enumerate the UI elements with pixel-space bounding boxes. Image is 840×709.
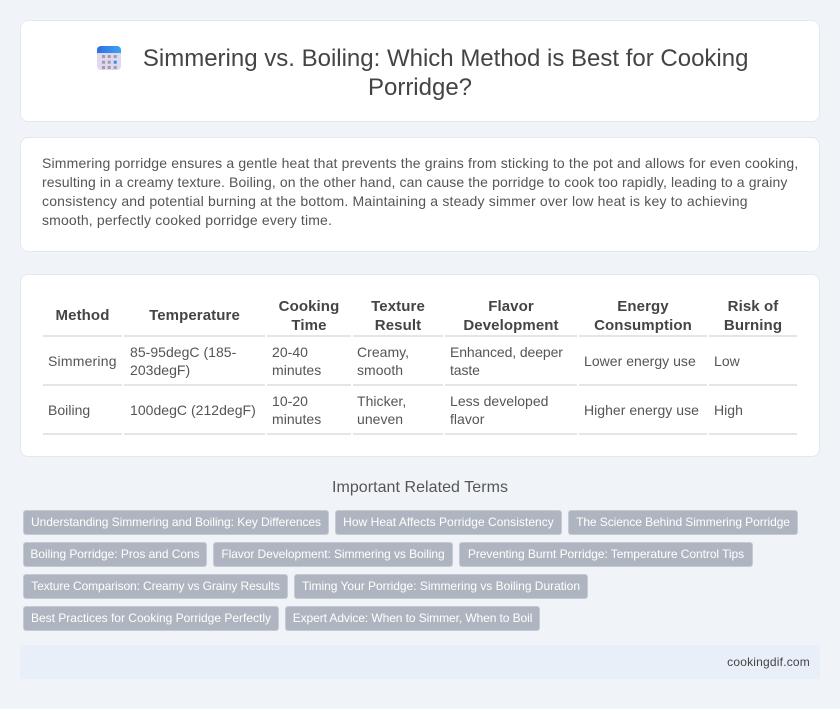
related terms tags: The Science Behind Simmering Porridge [576,515,790,529]
related terms tags: Best Practices for Cooking Porridge Perfectly [31,611,271,625]
table row: simmering: 85-95degC (185- [130,344,236,360]
table row: simmering: Lower energy use [584,353,696,369]
footer source link: cookingdif.com [727,655,810,669]
table row: boiling: minutes [272,411,321,427]
table row: boiling: Higher energy use [584,402,699,418]
table row: simmering: taste [450,362,480,378]
related terms tags: Boiling Porridge: Pros and Cons [30,547,200,561]
table header: Texture [371,298,425,315]
table header: Result [375,317,421,334]
table header: Risk of [728,298,778,315]
panel: title header [20,20,820,122]
panel: comparison table [20,274,820,457]
table row: boiling: flavor [450,411,484,427]
related terms tags: How Heat Affects Porridge Consistency [343,515,554,529]
intro paragraph: smooth, perfectly cooked porridge every time. [42,212,332,228]
table row: boiling: Boiling [48,402,90,418]
table header: Cooking [279,298,339,315]
table row: boiling: Thicker, [357,393,406,409]
intro paragraph [42,155,798,228]
related terms tags: Preventing Burnt Porridge: Temperature Control Tips [468,547,744,561]
table row: boiling: uneven [357,411,403,427]
intro paragraph: resulting in a creamy texture. Boiling, on the other hand, can cause the porridge to cook too rapidly, leading to a grainy [42,174,788,190]
table row: simmering: Simmering [48,353,117,369]
table header: Consumption [594,317,692,334]
table header: Energy [617,298,669,315]
table row: boiling: 100degC (212degF) [130,402,256,418]
table row: simmering: minutes [272,362,321,378]
table header: Development [463,317,559,334]
table header: Time [291,317,327,334]
table row: boiling: Less developed [450,393,548,409]
table row: boiling [48,393,743,427]
table row: boiling: High [714,402,743,418]
title: Simmering vs. Boiling: Which Method is Best for Cooking [143,45,748,72]
related terms tags: Understanding Simmering and Boiling: Key Differences [31,515,321,529]
title: Porridge? [368,74,472,101]
table row: simmering: Low [714,353,740,369]
title [143,45,748,101]
related terms tags: Timing Your Porridge: Simmering vs Boiling Duration [302,579,580,593]
related terms tags: Expert Advice: When to Simmer, When to Boil [293,611,532,625]
table row: boiling: 10-20 [272,393,308,409]
intro paragraph: Simmering porridge ensures a gentle heat that prevents the grains from sticking to the pot and allows for even cooking, [42,155,798,171]
table row: simmering: smooth [357,362,403,378]
table row: simmering: 20-40 [272,344,308,360]
table row: simmering: Creamy, [357,344,409,360]
table header: Temperature [149,307,240,324]
table header [56,298,782,334]
icon: calendar [97,46,121,70]
intro paragraph: consistency and potential burning at the bottom. Maintaining a steady simmer over low heat is key to achieving [42,193,748,209]
heading: related terms: Important Related Terms [332,479,508,496]
related terms tags: Flavor Development: Simmering vs Boiling [221,547,445,561]
footer [20,645,820,679]
panel: intro text [20,137,820,252]
table header: Method [56,307,109,324]
table header: Burning [724,317,782,334]
table header: Flavor [488,298,534,315]
related terms tags [23,510,798,631]
table row: simmering [48,344,740,378]
table row: simmering: 203degF) [130,362,190,378]
related terms tags: Texture Comparison: Creamy vs Grainy Results [31,579,280,593]
table row: simmering: Enhanced, deeper [450,344,563,360]
